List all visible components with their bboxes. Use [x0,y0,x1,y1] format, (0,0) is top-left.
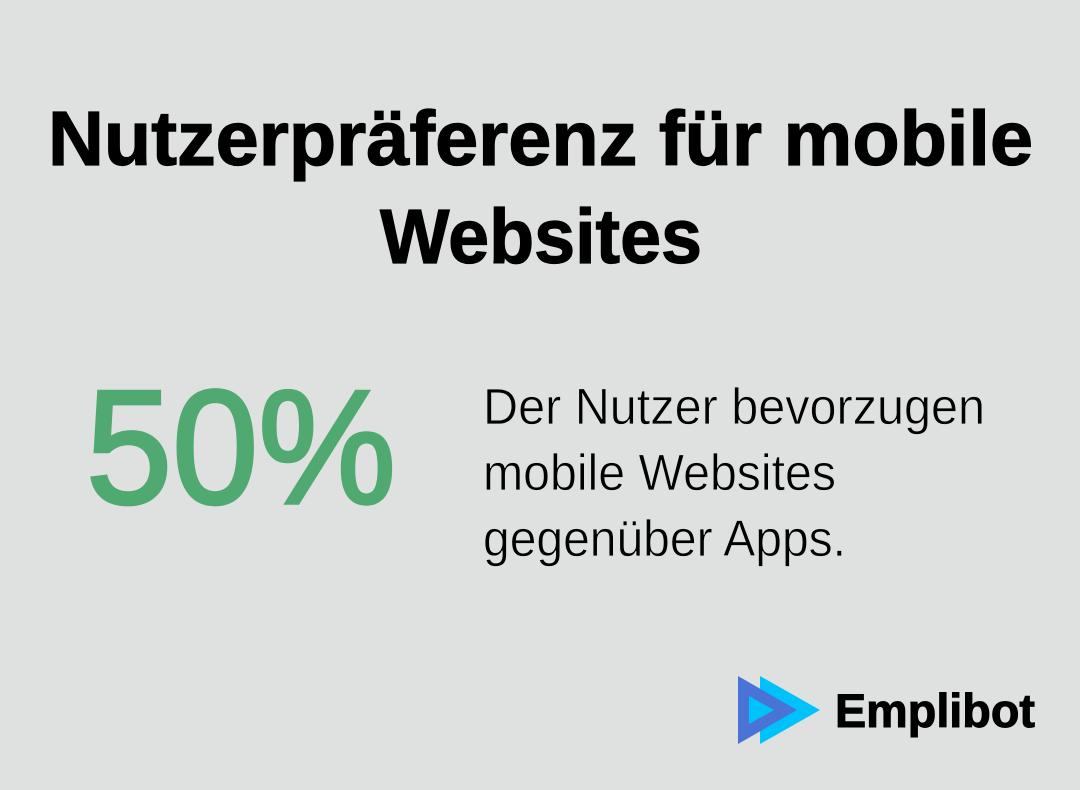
title [48,96,1033,280]
description text: gegenüber Apps. [483,510,846,567]
description text: mobile Websites [483,444,836,501]
statistic: 50%: 50% [86,357,396,538]
description text [483,378,985,567]
icon: play triangles [738,676,820,744]
title: Nutzerpräferenz für mobile [48,96,1033,182]
title: Websites [380,194,702,280]
logo wordmark: Emplibot [835,684,1035,737]
description text: Der Nutzer bevorzugen [483,378,985,435]
logo: Emplibot [738,676,1035,744]
